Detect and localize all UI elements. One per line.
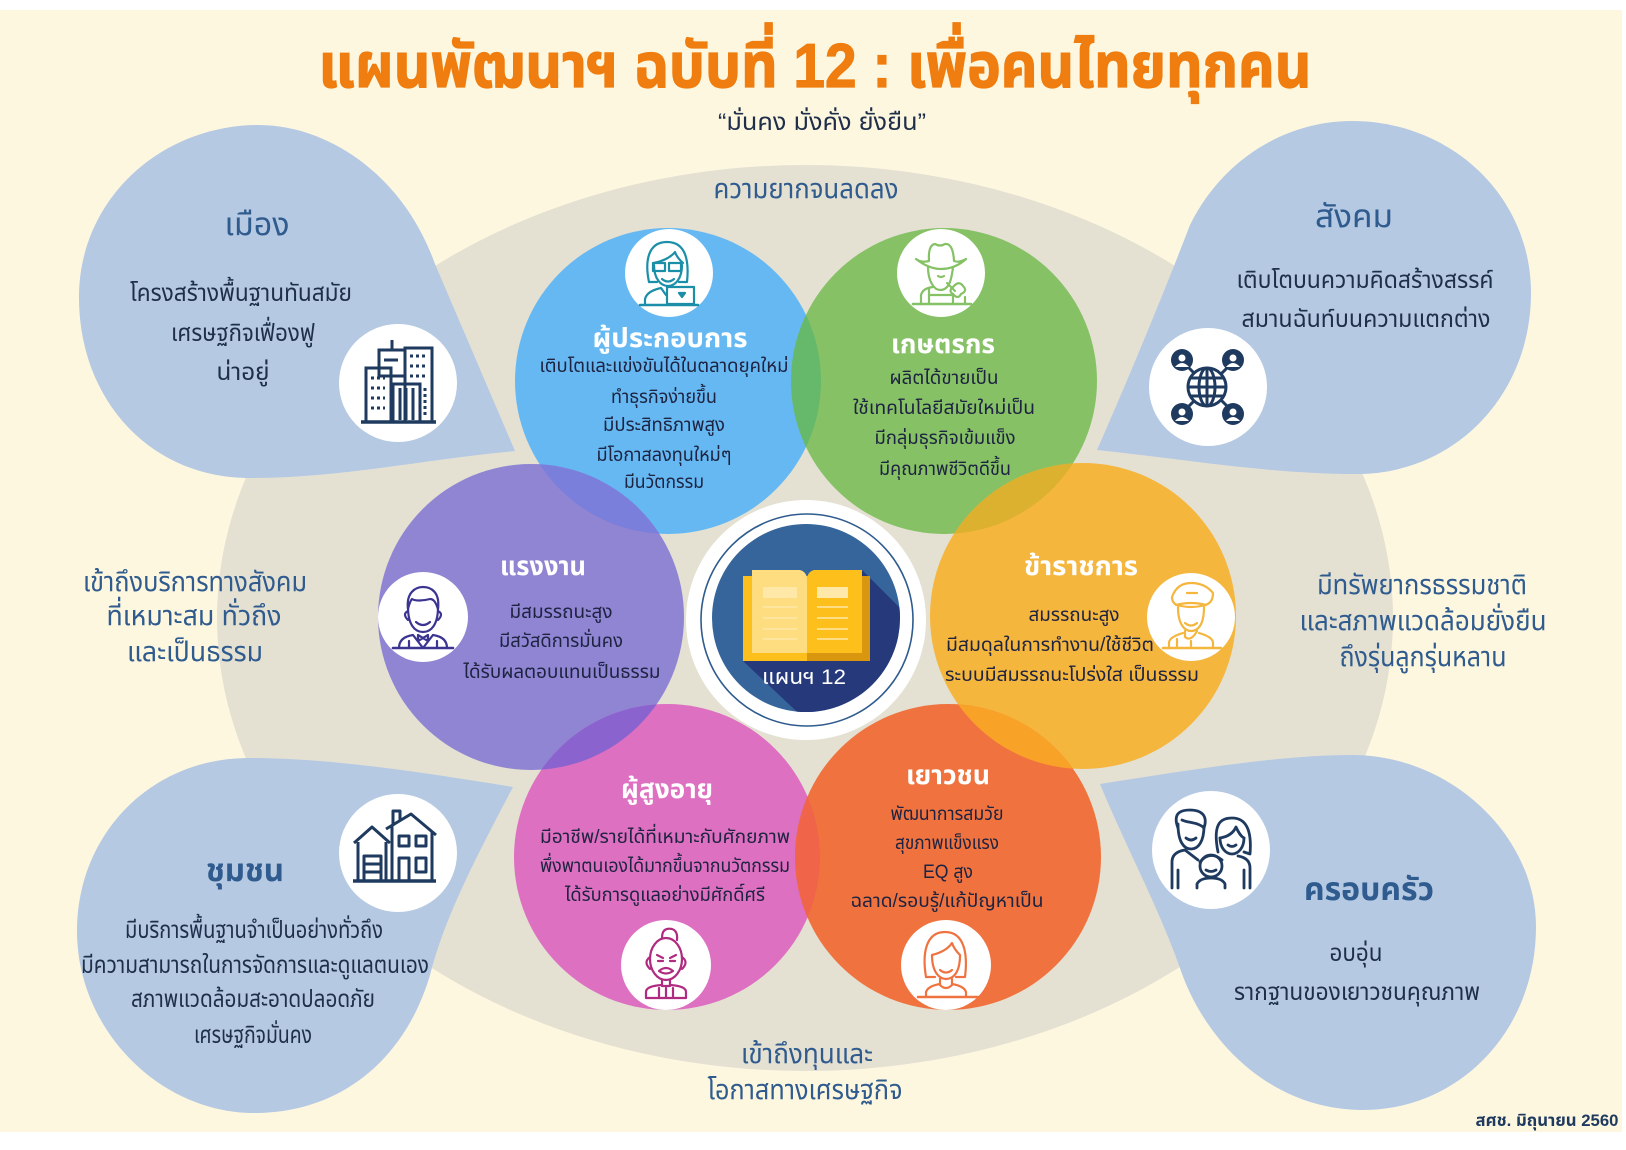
icon: open book (743, 570, 870, 661)
entrepreneur text: เติบโตและแข่งขันได้ในตลาดยุคใหม่ (540, 354, 788, 377)
community text: สภาพแวดล้อมสะอาดปลอดภัย (131, 986, 375, 1013)
city heading: เมือง (224, 206, 290, 242)
youth text: EQ สูง (923, 862, 973, 884)
family text: รากฐานของเยาวชนคุณภาพ (1234, 979, 1480, 1007)
elderly text: มีอาชีพ/รายได้ที่เหมาะกับศักยภาพ (540, 823, 790, 848)
entrepreneur text: ทำธุรกิจง่ายขึ้น (611, 383, 717, 408)
farmer text: ผลิตได้ขายเป็น (890, 366, 998, 389)
society text (1236, 267, 1494, 333)
icon: city buildings (339, 324, 457, 442)
labour heading: แรงงาน (500, 551, 586, 581)
labour content (378, 551, 660, 683)
icon: network globe (1149, 328, 1267, 446)
panel: farmer circle (791, 228, 1097, 534)
youth text: พัฒนาการสมวัย (890, 804, 1004, 825)
civil servant text: ระบบมีสมรรถนะโปร่งใส เป็นธรรม (945, 663, 1199, 686)
goal: social services: และเป็นธรรม (127, 636, 263, 667)
elderly text: ได้รับการดูแลอย่างมีศักดิ์ศรี (564, 883, 765, 907)
panel: community (77, 758, 513, 1113)
entrepreneur text: มีนวัตกรรม (624, 472, 704, 493)
civil servant heading: ข้าราชการ (1024, 551, 1138, 581)
goal: natural resources: ถึงรุ่นลูกรุ่นหลาน (1340, 641, 1506, 674)
goal: access to capital: เข้าถึงทุนและ (741, 1038, 873, 1070)
icon: entrepreneur woman with laptop (625, 229, 713, 317)
icon: farmer (897, 229, 985, 317)
city text: โครงสร้างพื้นฐานทันสมัย (130, 276, 352, 307)
panel: society (1097, 121, 1531, 474)
icon: young woman (901, 920, 991, 1010)
youth content (850, 760, 1044, 1010)
panel: family (1100, 755, 1536, 1110)
farmer heading: เกษตรกร (891, 329, 995, 359)
society text: เติบโตบนความคิดสร้างสรรค์ (1236, 267, 1494, 294)
labour text (463, 602, 660, 683)
panel: city (79, 125, 515, 478)
panel: labour circle (378, 464, 684, 770)
icon: civil servant with cap (1147, 573, 1235, 661)
entrepreneur text: มีประสิทธิภาพสูง (603, 415, 725, 437)
family heading: ครอบครัว (1304, 871, 1434, 907)
icon: houses (339, 794, 457, 912)
youth text: ฉลาด/รอบรู้/แก้ปัญหาเป็น (850, 889, 1044, 913)
entrepreneur heading: ผู้ประกอบการ (592, 323, 748, 354)
youth text: สุขภาพแข็งแรง (895, 833, 999, 854)
central beige ellipse (217, 165, 1393, 1071)
civil servant content (945, 551, 1235, 686)
elderly text: พึ่งพาตนเองได้มากขึ้นจากนวัตกรรม (540, 852, 790, 877)
panel: civil servant circle (930, 463, 1236, 769)
panel: entrepreneur circle (515, 228, 821, 534)
farmer text: มีคุณภาพชีวิตดีขึ้น (879, 455, 1011, 480)
goal: social services: เข้าถึงบริการทางสังคม (83, 566, 307, 597)
goal: natural resources (1300, 569, 1546, 674)
youth heading: เยาวชน (906, 760, 990, 790)
elderly heading: ผู้สูงอายุ (621, 774, 713, 805)
farmer content (853, 229, 1035, 480)
entrepreneur text (540, 354, 788, 493)
goal: natural resources: และสภาพแวดล้อมยั่งยืน (1300, 603, 1546, 636)
civil servant text: สมรรถนะสูง (1028, 605, 1120, 627)
city text: เศรษฐกิจเฟื่องฟู (171, 316, 315, 348)
farmer text (853, 366, 1035, 480)
farmer text: ใช้เทคโนโลยีสมัยใหม่เป็น (853, 396, 1035, 419)
society text: สมานฉันท์บนความแตกต่าง (1242, 305, 1490, 333)
community text: เศรษฐกิจมั่นคง (194, 1019, 312, 1049)
title: แผนพัฒนาฯ ฉบับที่ 12 : เพื่อคนไทยทุกคน (318, 22, 1312, 103)
family text: อบอุ่น (1330, 939, 1382, 968)
goal: social services (83, 566, 307, 667)
community text (81, 913, 429, 1049)
goal: access to capital: โอกาสทางเศรษฐกิจ (708, 1074, 902, 1105)
farmer text: มีกลุ่มธุรกิจเข้มแข็ง (874, 426, 1016, 449)
entrepreneur text: มีโอกาสลงทุนใหม่ๆ (596, 443, 732, 466)
icon: elderly man (621, 920, 711, 1010)
civil servant text (945, 605, 1199, 686)
goal: natural resources: มีทรัพยากรธรรมชาติ (1317, 569, 1527, 600)
city text (130, 276, 352, 387)
community text: มีบริการพื้นฐานจำเป็นอย่างทั่วถึง (125, 913, 383, 944)
panel: youth circle (795, 704, 1101, 1010)
elderly content (540, 774, 790, 1010)
labour text: มีสวัสดิการมั่นคง (499, 628, 623, 652)
emblem label: แผนฯ 12 (762, 666, 846, 689)
civil servant text: มีสมดุลในการทำงาน/ใช้ชีวิต (946, 633, 1154, 656)
goal: social services: ที่เหมาะสม ทั่วถึง (106, 596, 282, 631)
community heading: ชุมชน (206, 852, 284, 889)
icon: labourer with bow tie (378, 572, 468, 662)
subtitle: “มั่นคง มั่งคั่ง ยั่งยืน” (718, 106, 926, 136)
community text: มีความสามารถในการจัดการและดูแลตนเอง (81, 952, 429, 980)
labour text: มีสมรรถนะสูง (510, 602, 612, 624)
city text: น่าอยู่ (216, 358, 270, 387)
panel: elderly circle (514, 704, 820, 1010)
goal: poverty reduced: ความยากจนลดลง (714, 173, 898, 204)
family text (1234, 939, 1480, 1007)
credit: สศช. มิถุนายน 2560 (1476, 1111, 1618, 1131)
icon: family (1152, 791, 1270, 909)
central emblem (686, 500, 926, 740)
society heading: สังคม (1315, 198, 1393, 234)
youth text (850, 804, 1044, 913)
entrepreneur content (540, 229, 788, 493)
goal: access to capital (708, 1038, 902, 1105)
elderly text (540, 823, 790, 907)
circle overlap lenses (378, 228, 1236, 1010)
labour text: ได้รับผลตอบแทนเป็นธรรม (463, 660, 660, 683)
